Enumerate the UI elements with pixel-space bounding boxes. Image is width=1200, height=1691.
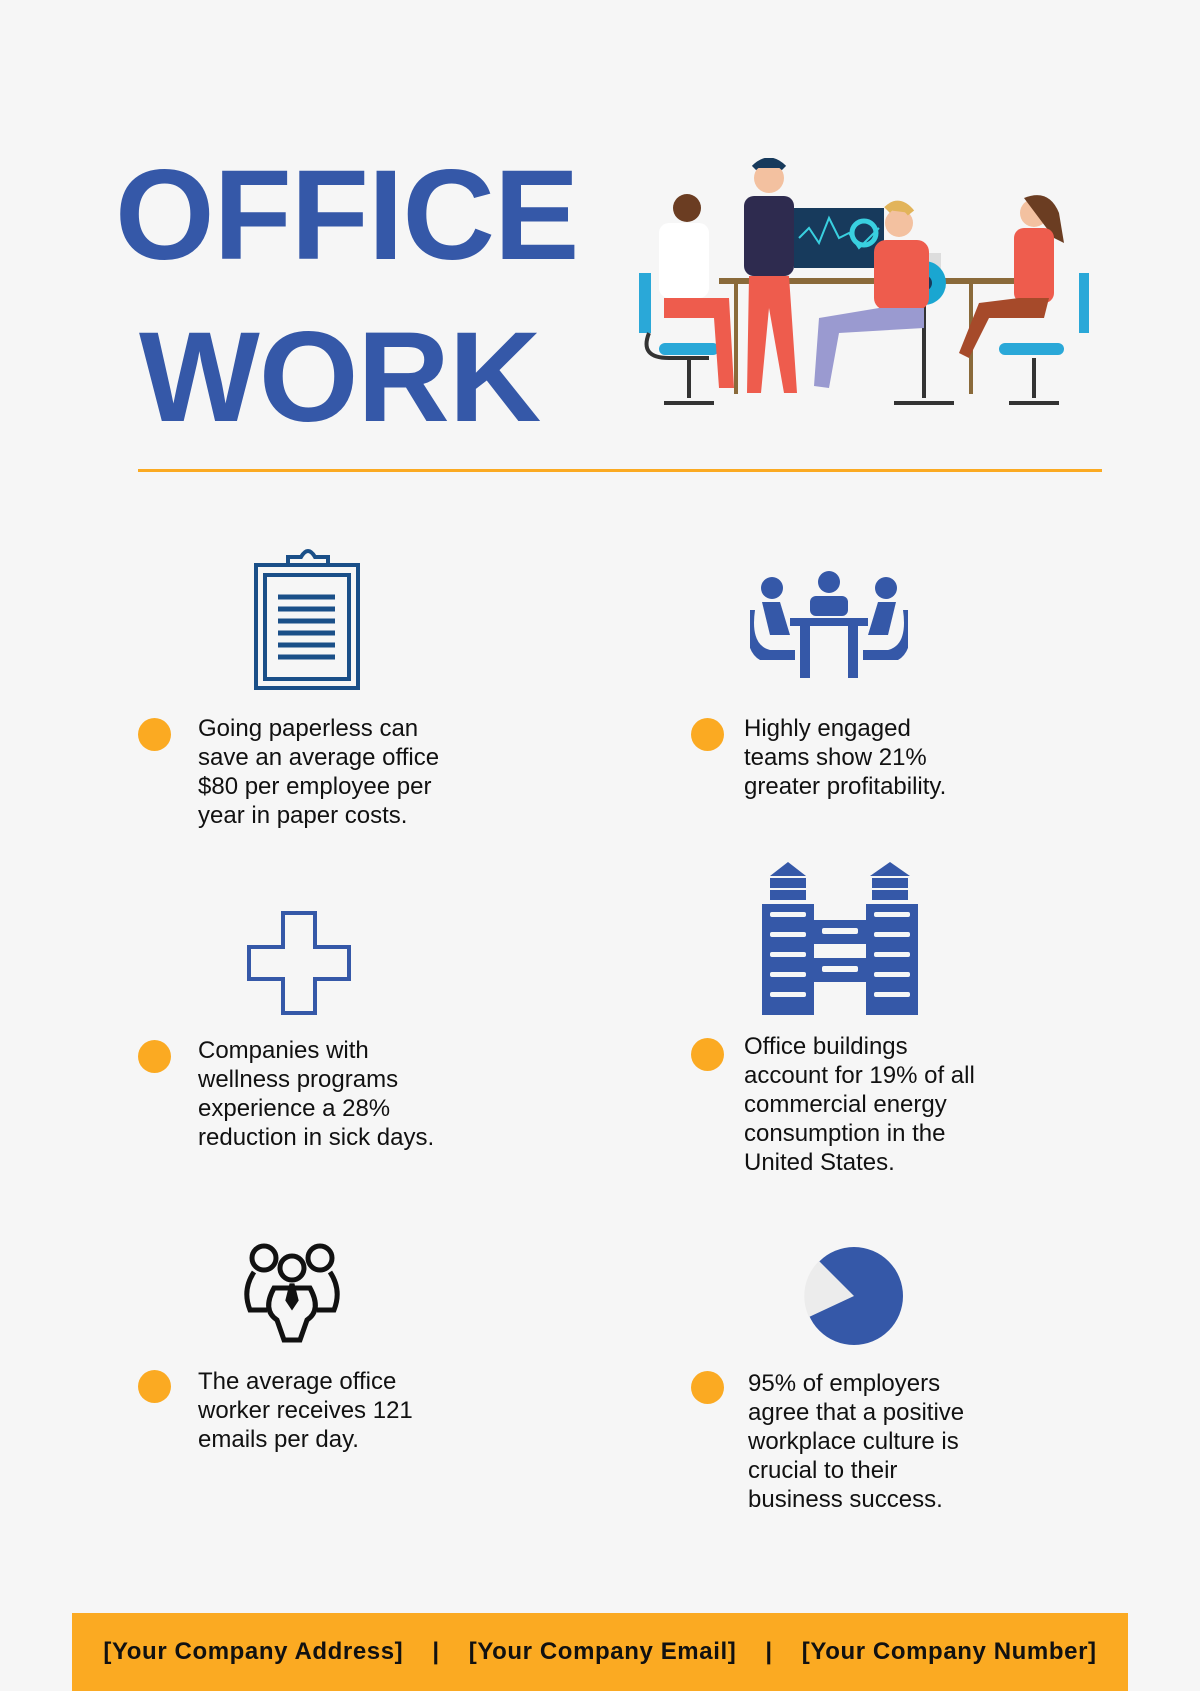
title: WORK [139,306,540,449]
stat: culture: crucial to their [748,1457,897,1484]
stat: emails: worker receives 121 [198,1397,413,1424]
stat: paperless: year in paper costs. [198,802,407,829]
stat: emails [138,1368,413,1453]
title [115,144,578,449]
icon: people group [244,1244,340,1342]
icon: office buildings [762,862,918,1015]
stat: wellness: Companies with [198,1037,369,1064]
stat: energy: account for 19% of all [744,1062,975,1089]
stat: paperless: save an average office [198,744,439,771]
stat: culture: workplace culture is [748,1428,959,1455]
stat: paperless [138,715,439,829]
stat: engaged teams: Highly engaged [744,715,911,742]
illustration: office team [639,158,1089,405]
stat: energy [691,1033,975,1176]
stat: energy: commercial energy [744,1091,947,1118]
stat: engaged teams: teams show 21% [744,744,927,771]
stat: paperless: $80 per employee per [198,773,431,800]
stat: engaged teams: greater profitability. [744,773,946,800]
stat: emails: emails per day. [198,1426,359,1453]
icon: team meeting [750,571,908,678]
stat: wellness: wellness programs [198,1066,398,1093]
icon: medical cross [247,911,351,1015]
title: OFFICE [115,144,578,287]
icon: clipboard [254,549,360,690]
divider [138,469,1102,472]
stat: emails: The average office [198,1368,396,1395]
stat: engaged teams [691,715,946,800]
stat: culture [691,1370,964,1513]
stat: culture: 95% of employers [748,1370,940,1397]
stat: wellness: experience a 28% [198,1095,390,1122]
stat: wellness: reduction in sick days. [198,1124,434,1151]
stat: energy: United States. [744,1149,895,1176]
stat: culture: agree that a positive [748,1399,964,1426]
footer: [Your Company Address] | [Your Company Email] | [Your Company Number] [103,1638,1097,1665]
stat: paperless: Going paperless can [198,715,418,742]
icon: pie chart [804,1247,903,1345]
stat: energy: consumption in the [744,1120,945,1147]
stat: wellness [138,1037,434,1151]
stat: energy: Office buildings [744,1033,908,1060]
stat: culture: business success. [748,1486,943,1513]
footer [72,1613,1128,1691]
